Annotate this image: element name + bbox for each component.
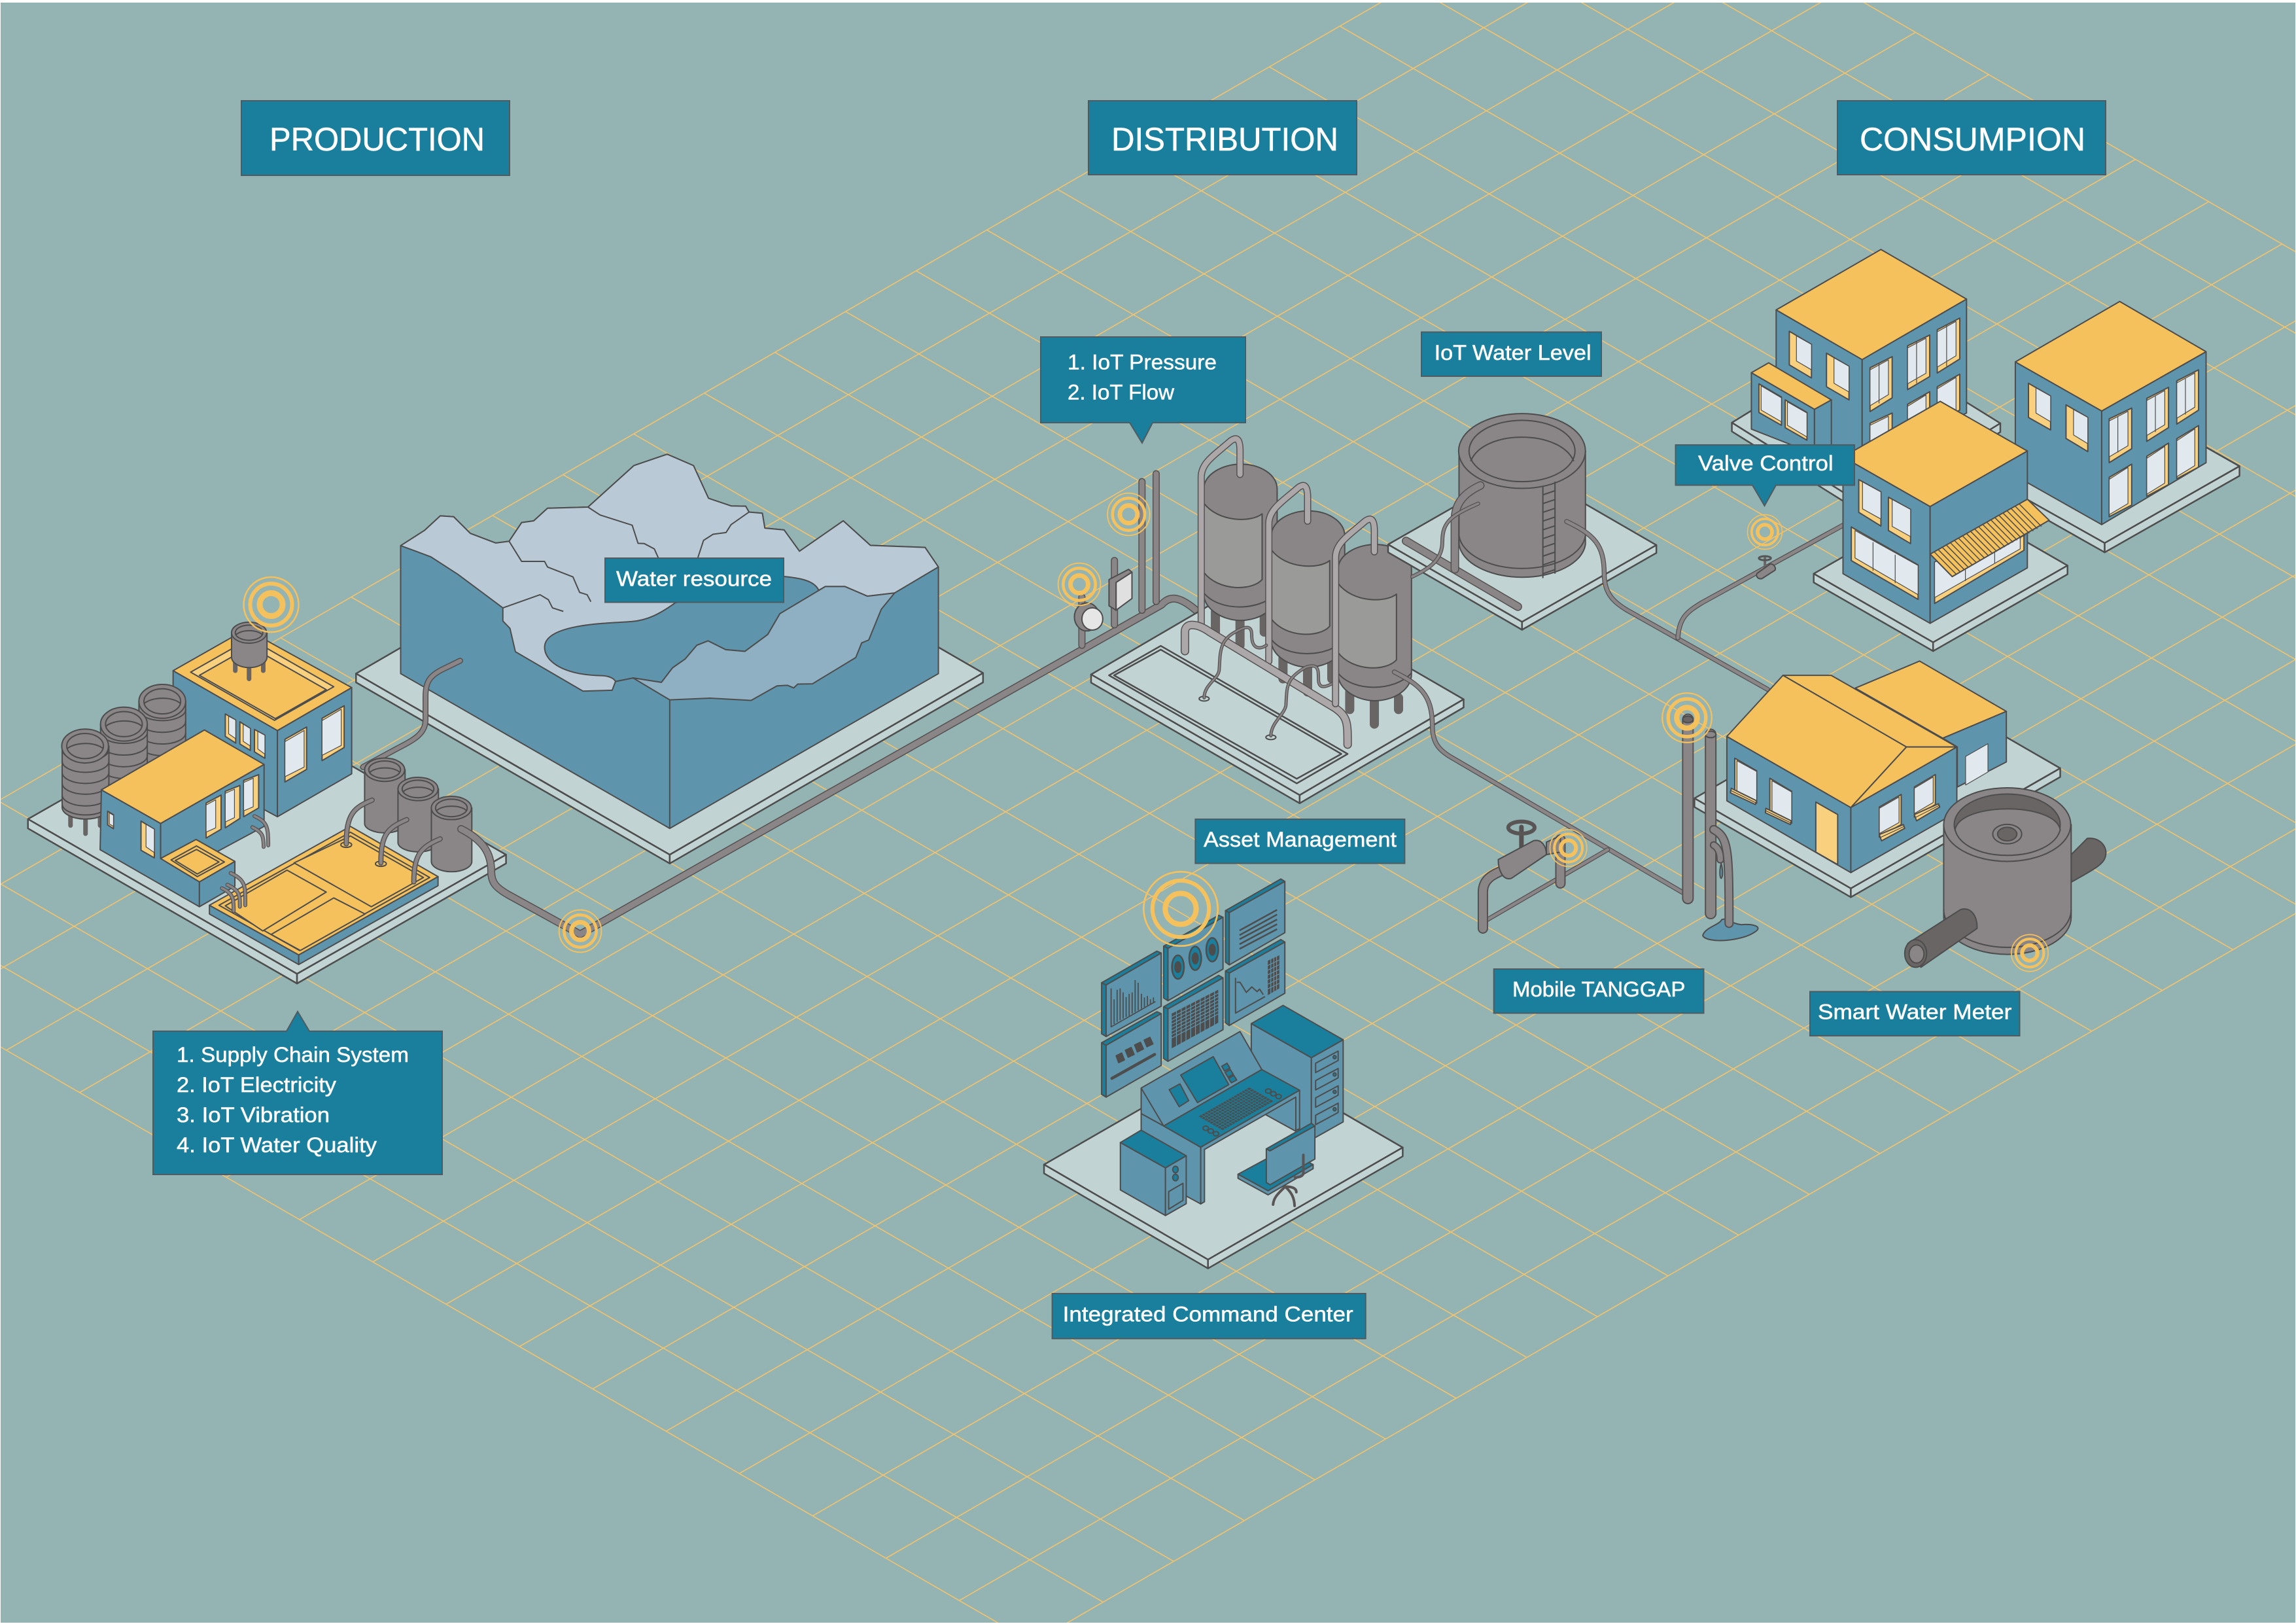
right apartment building [2015,302,2206,525]
panel: treatment base plate [1091,578,1464,803]
main pipeline production to distribution [461,599,1198,934]
screen: text report [1225,879,1285,965]
pressure vessel two [1269,485,1345,692]
terrain block body [401,454,939,828]
label: IoT water level: IoT Water Level [1435,341,1592,364]
production plant [28,622,506,983]
Mobile TANGGAP gate valve [1483,822,1560,928]
rear building annex [1751,362,1832,454]
operator chair [1238,1123,1315,1206]
icon: signal on main pipe [559,910,601,952]
panel: water resource base plate [356,492,983,864]
panel: command center base plate [1044,1053,1402,1269]
icon: signal on control valve [1748,515,1782,549]
callout: production sensors list: 4. IoT Water Quality [177,1133,377,1157]
front building with annex [100,730,268,907]
label: asset management [1195,819,1404,864]
label: mobile tanggap: Mobile TANGGAP [1512,978,1685,1001]
heading: production: PRODUCTION [270,121,485,158]
screen: gauges [1164,915,1223,1000]
outgoing distribution pipelines [1395,521,1843,892]
icon: signal on flow riser [1107,493,1150,535]
callout: production sensors list: 1. Supply Chain System [177,1043,409,1067]
heading: consumpion [1837,101,2106,175]
leak monitor poles with dripping hose [1682,716,1758,940]
callout: production sensors list: 3. IoT Vibration [177,1103,330,1127]
pressure vessel three [1336,519,1412,724]
heading: distribution: DISTRIBUTION [1111,121,1338,158]
pressure vessel one [1201,439,1277,645]
icon: signal on command center [1143,872,1218,946]
integrated command center [1044,879,1402,1269]
distribution treatment station [1074,414,1656,803]
IoT water level tank [1459,414,1586,578]
label: water resource [605,558,784,602]
label: IoT water level [1421,332,1601,376]
screen: line chart [1225,940,1285,1025]
screen: data matrix [1164,976,1223,1061]
panel: house base plate [1694,678,2061,897]
panel: storage tank base plate [1388,468,1656,630]
server rack [1251,1006,1343,1140]
label: smart water meter: Smart Water Meter [1818,1000,2012,1024]
icon: signal on mobile valve [1550,830,1587,866]
screen: bar chart [1102,951,1161,1036]
rear apartment building [1776,249,1966,463]
desktop computer tower [1121,1130,1186,1216]
panel: rear building base plate [1732,340,2000,516]
icon: small valve [1756,556,1775,579]
thin drain pipes [1199,627,1333,739]
lake [545,576,826,682]
consumption apartment blocks [1732,249,2240,651]
settling basin [209,826,438,964]
small pipes into basin [222,800,440,911]
stacked silos [61,684,186,834]
risers and pressure gauge [1074,474,1156,645]
callout: valve control: Valve Control [1698,451,1834,475]
tank inlet pipes [1412,485,1480,576]
shop awning [1930,499,2049,576]
callout: production sensors list [153,1012,442,1174]
icon: signal on water meter [2011,934,2048,972]
callout: pressure and flow [1041,337,1245,443]
icon: signal on monitor pole [1662,693,1712,743]
front shop building [1843,401,2027,624]
panel: production base plate [28,700,506,983]
callout: pressure and flow: 2. IoT Flow [1068,381,1175,404]
water resource terrain block [356,454,983,864]
callout: valve control [1676,445,1854,506]
signal icons [243,493,2048,972]
label: integrated command center [1052,1294,1366,1339]
icon: signal on roof tank [243,577,298,632]
callout: production sensors list: 2. IoT Electricity [177,1073,336,1097]
roof tank [232,622,267,679]
icon: signal on pressure gauge [1058,563,1100,605]
heading: consumpion: CONSUMPION [1860,121,2085,158]
wide header pipe [1185,625,1348,745]
smart water meter chamber [1905,788,2106,967]
mountain land surface [401,454,939,691]
label: integrated command center: Integrated Command Center [1063,1303,1353,1326]
cylindrical tanks [364,758,472,872]
pipe branch to Mobile TANGGAP valve [1487,849,1608,920]
ground rod [1406,541,1518,607]
intake pipe from water resource [363,661,460,767]
label: smart water meter [1810,992,2020,1036]
terrain ridge lines [503,507,749,828]
lowland surface [633,586,895,701]
back building [173,629,352,817]
label: mobile tanggap [1494,969,1703,1013]
callout: pressure and flow: 1. IoT Pressure [1068,351,1217,374]
heading: distribution [1088,101,1357,175]
rear house wing [1855,661,2006,787]
consumption house, well and meter [1483,661,2106,967]
control desk [1141,1032,1300,1204]
panel: right building base plate [1979,395,2240,552]
panel: front building base plate [1814,497,2068,651]
main house [1727,675,1957,873]
screen: slider [1102,1012,1161,1097]
label: asset management: Asset Management [1204,828,1397,851]
heading: production [241,101,510,175]
label: water resource: Water resource [616,567,772,590]
